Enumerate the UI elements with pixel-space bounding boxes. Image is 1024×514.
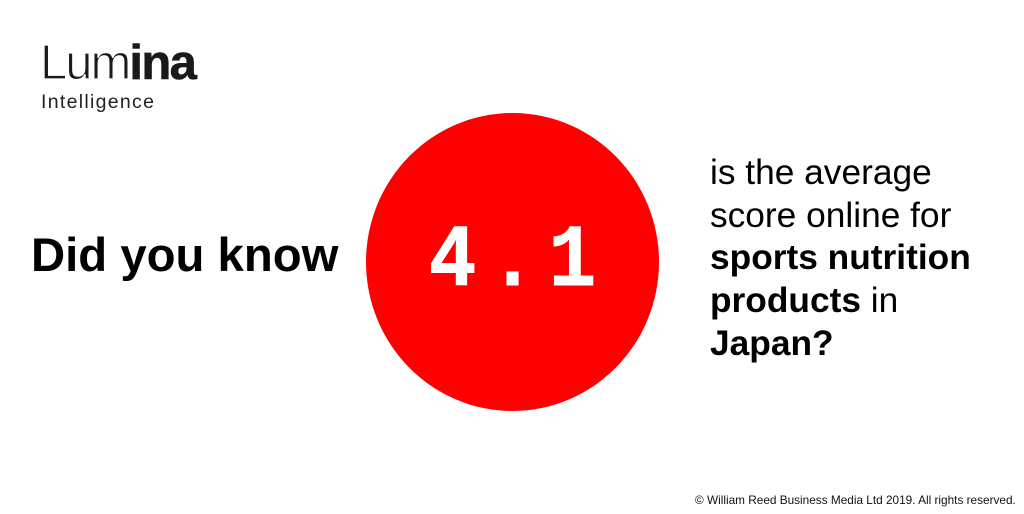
logo: Lumina Intelligence <box>40 36 198 113</box>
description text: sports nutrition <box>710 238 971 277</box>
description text: is the average <box>710 153 932 192</box>
description text <box>710 153 971 363</box>
description text: score online for <box>710 196 951 235</box>
description text: products in <box>710 281 898 320</box>
logo wordmark: Lumina <box>40 36 195 90</box>
score number: 4.1 <box>429 213 609 312</box>
red circle with score <box>366 113 659 411</box>
description text: Japan? <box>710 324 834 363</box>
logo subtitle: Intelligence <box>41 91 155 113</box>
heading: Did you know: Did you know <box>31 229 338 282</box>
copyright footer: © William Reed Business Media Ltd 2019. All rights reserved. <box>695 493 1016 507</box>
